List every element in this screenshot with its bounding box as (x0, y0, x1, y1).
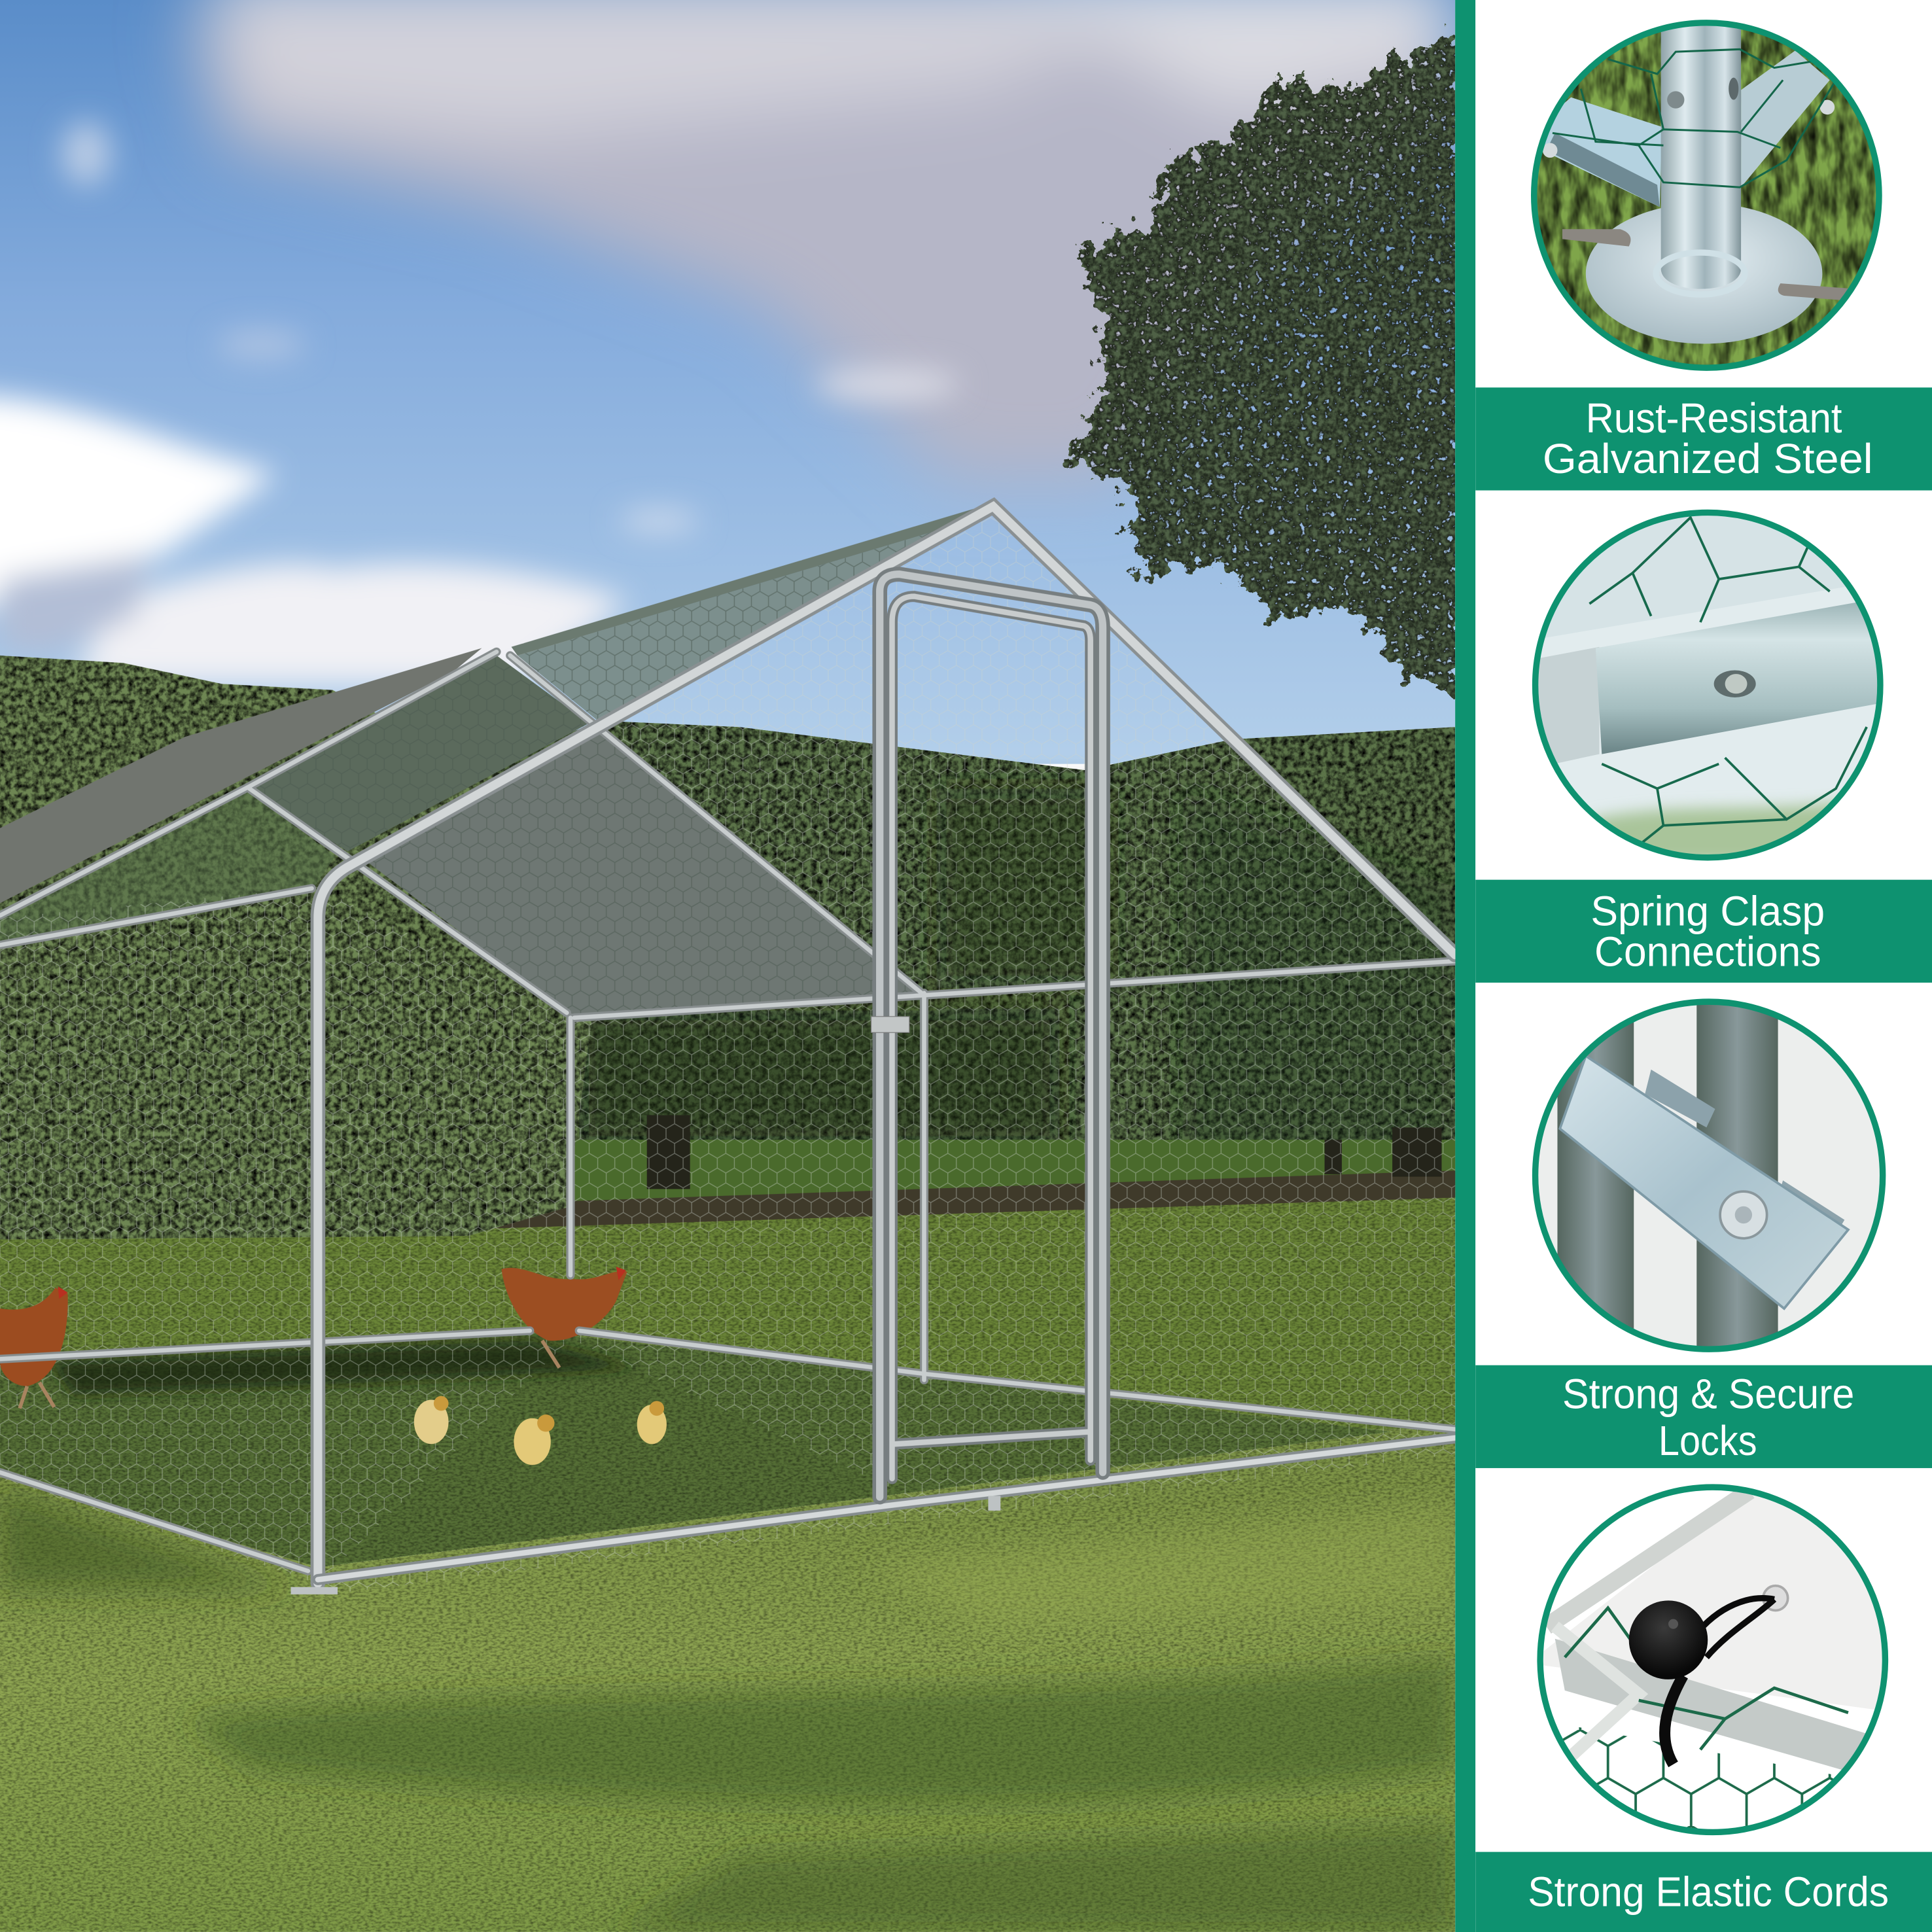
door latch plate (871, 1017, 909, 1032)
icon: door lock plate photo (1528, 998, 1891, 1361)
roof panel: middle shade (248, 656, 589, 851)
label bar: strong and secure (1475, 1365, 1932, 1468)
sky with clouds (0, 0, 1455, 764)
panel: rust-resistant galvanized steel (1475, 17, 1932, 491)
coop floor (0, 1331, 1392, 1568)
roof tarp (0, 648, 482, 903)
panel: strong elastic cords (1475, 1479, 1932, 1932)
caption: spring clasp connections: Spring Clasp (1590, 887, 1825, 934)
icon: elastic cord ball bungee photo (1528, 1479, 1897, 1848)
label bar: rust-resistant (1475, 387, 1932, 491)
chicken wire mesh walls (0, 508, 1455, 1596)
caption: strong and secure locks: Strong & Secure (1562, 1371, 1854, 1418)
foreground grass (0, 1430, 1455, 1932)
label bar: elastic cords (1475, 1852, 1932, 1932)
hen left (0, 1286, 68, 1409)
caption: spring clasp connections (1590, 887, 1825, 975)
coop steel frame (0, 506, 1455, 1583)
caption: rust-resistant galvanized steel: Galvanized Steel (1543, 435, 1873, 482)
panel: strong and secure locks (1475, 998, 1932, 1468)
roof panel: front shade (364, 727, 914, 1018)
door frame inner (892, 597, 1091, 1479)
left hedge (0, 656, 591, 1240)
roof panel: upper ridge (518, 529, 944, 720)
door frame outer (880, 574, 1103, 1497)
icon: spring clasp tube photo (1528, 505, 1891, 869)
photo: chicken coop in garden (0, 0, 1466, 1932)
caption: strong elastic cords: Strong Elastic Cords (1528, 1868, 1889, 1915)
panel: spring clasp connections (1475, 505, 1932, 983)
caption: spring clasp connections: Connections (1594, 928, 1821, 975)
base feet (290, 1496, 1000, 1594)
caption: rust-resistant galvanized steel: Rust-Resistant (1586, 395, 1842, 442)
back hedge dark tree shading (579, 788, 1455, 1183)
mesh panel: far gable (0, 791, 335, 943)
caption: rust-resistant galvanized steel (1543, 395, 1873, 482)
tree (1066, 31, 1466, 702)
background field and lawn (0, 1115, 1455, 1441)
green divider strip (1455, 0, 1475, 1932)
caption: strong and secure locks: Locks (1659, 1417, 1757, 1464)
label bar: spring clasp (1475, 880, 1932, 983)
hen centre (501, 1267, 627, 1367)
hens and chicks (0, 1267, 667, 1465)
white feature column (1475, 0, 1932, 1932)
coop roof (0, 505, 986, 1018)
back hedge (491, 722, 1455, 1140)
chicks (414, 1396, 667, 1465)
caption: strong and secure locks (1562, 1371, 1854, 1464)
icon: galvanized post base photo (1528, 17, 1885, 375)
